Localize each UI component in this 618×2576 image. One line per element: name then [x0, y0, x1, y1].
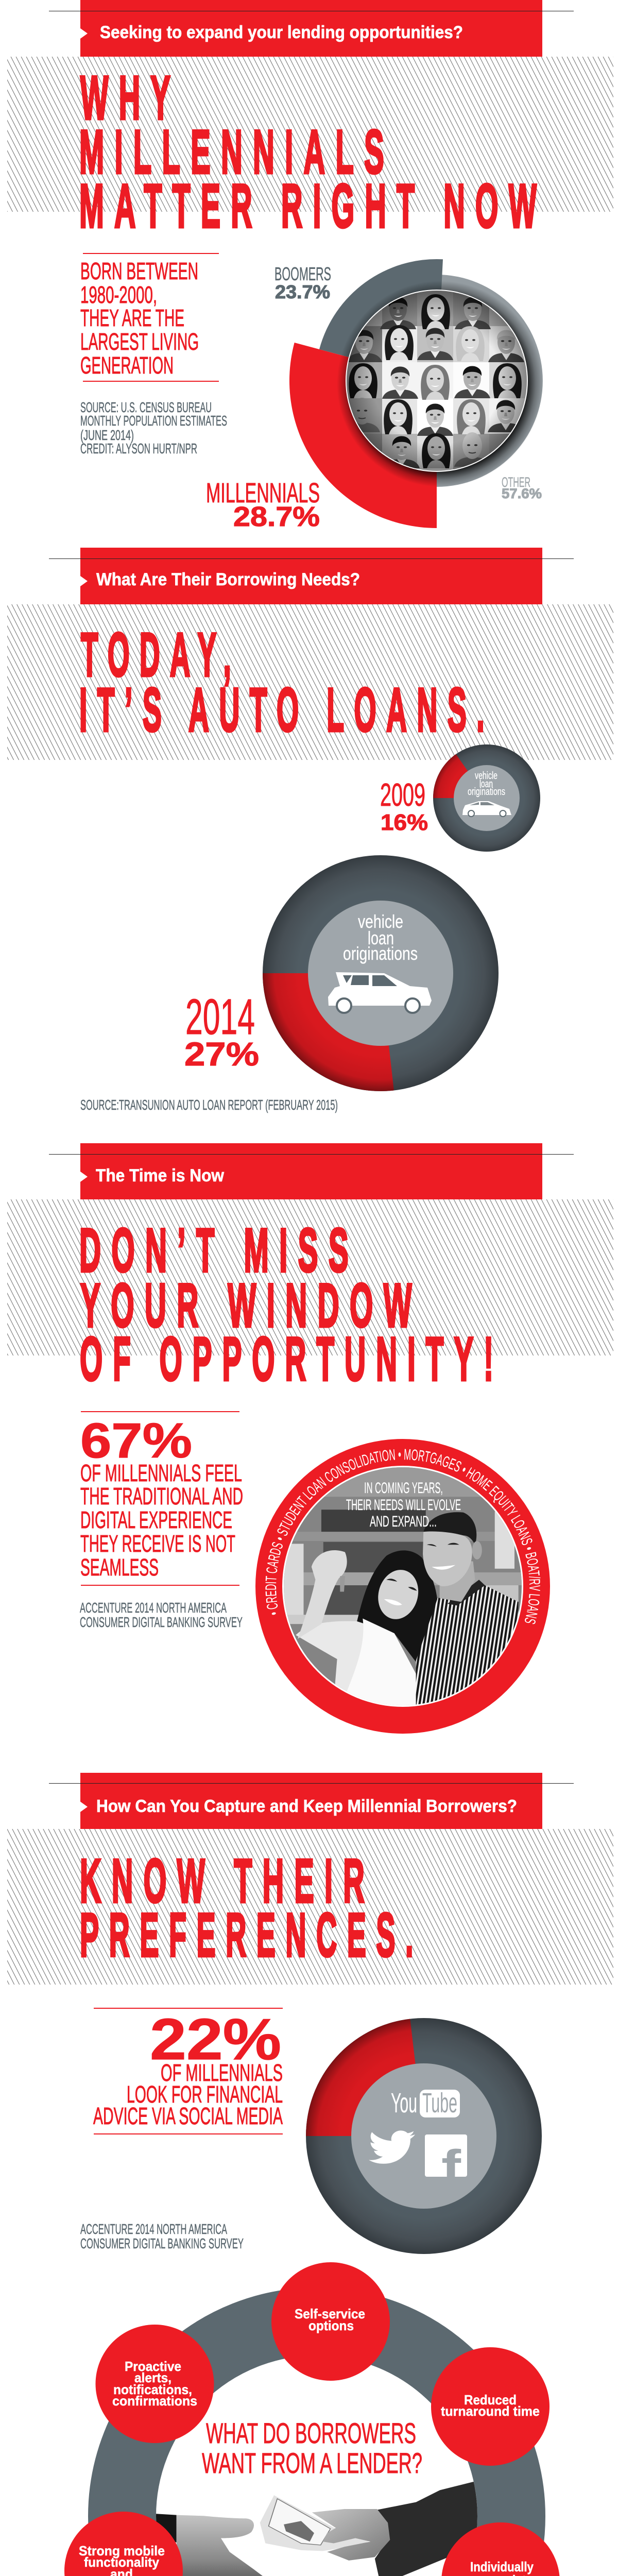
title: why millennials matter right now: WHY	[80, 63, 181, 132]
title: what do borrowers want from a lender: WHAT DO BORROWERS	[206, 2417, 416, 2449]
circle: self-service options: Self-service	[295, 2306, 365, 2321]
source note: accenture: ACCENTURE 2014 NORTH AMERICA	[80, 2221, 227, 2237]
callout: born between 1980-2000: GENERATION	[80, 352, 174, 379]
circle: individually appropriate offers	[441, 2522, 560, 2576]
source note: accenture	[80, 1600, 243, 1630]
callout: 67% of millennials: THE TRADITIONAL AND	[80, 1483, 243, 1510]
icon: youtube	[391, 2088, 460, 2119]
label: other: 57.6%	[502, 486, 542, 501]
icon: facebook	[425, 2134, 467, 2177]
donut chart: 2014 vehicle loan originations 27%: vehicle	[358, 911, 403, 932]
source note: accenture: CONSUMER DIGITAL BANKING SURVEY	[80, 2235, 244, 2251]
donut chart: 2014 vehicle loan originations 27%	[263, 855, 499, 1091]
icon: small car	[462, 801, 511, 817]
header bar: seeking to expand: Seeking to expand your lending opportunities?	[100, 23, 463, 42]
diagram: ring of what borrowers want	[64, 2262, 560, 2576]
donut chart: 2009 vehicle loan originations 16%: originations	[468, 786, 505, 798]
header bar: the time is now: The Time is Now	[96, 1166, 225, 1185]
donut chart: social media 22%	[306, 2018, 542, 2254]
header bar: the time is now	[49, 1143, 574, 1199]
header bar: borrowing needs	[49, 548, 574, 604]
label: boomers: 23.7%	[275, 281, 330, 302]
donut chart: 2009 vehicle loan originations 16%: loan	[479, 778, 493, 790]
source note: accenture	[80, 2221, 244, 2251]
callout: born between 1980-2000: 1980-2000,	[80, 281, 157, 308]
title: today, it's auto loans: TODAY,	[81, 620, 241, 689]
source note: accenture: CONSUMER DIGITAL BANKING SURVEY	[80, 1614, 243, 1630]
hatched band 1	[7, 57, 613, 212]
donut chart: 2014 vehicle loan originations 27%: loan	[368, 927, 394, 948]
circle: reduced turnaround time	[431, 2347, 550, 2466]
text: in coming years: IN COMING YEARS,	[364, 1480, 443, 1497]
label: other: OTHER	[502, 474, 530, 490]
callout: born between 1980-2000: BORN BETWEEN	[80, 258, 198, 284]
source note: census: (JUNE 2014)	[80, 427, 134, 443]
header bar: capture and keep: How Can You Capture and Keep Millennial Borrowers?	[96, 1797, 517, 1816]
hatched band 2	[7, 604, 613, 760]
callout: born between 1980-2000: LARGEST LIVING	[80, 328, 199, 355]
label: other	[502, 474, 542, 501]
hatched band 3	[7, 1199, 613, 1355]
label: boomers	[274, 263, 331, 302]
circle: proactive alerts	[96, 2325, 214, 2443]
callout: 67% of millennials: SEAMLESS	[80, 1554, 159, 1581]
callout: 67% of millennials: THEY RECEIVE IS NOT	[80, 1530, 235, 1557]
circle: proactive alerts: Proactive	[125, 2359, 181, 2374]
circle: proactive alerts: notifications,	[113, 2382, 192, 2397]
title: today, it's auto loans	[79, 620, 494, 744]
label: millennials: MILLENNIALS	[206, 478, 320, 509]
circle: proactive alerts: confirmations	[112, 2393, 197, 2409]
source note: census: MONTHLY POPULATION ESTIMATES	[80, 413, 227, 429]
title: know their preferences	[80, 1846, 423, 1970]
callout: born between 1980-2000: THEY ARE THE	[80, 304, 184, 331]
source note: accenture: ACCENTURE 2014 NORTH AMERICA	[80, 1600, 227, 1616]
source note: census: SOURCE: U.S. CENSUS BUREAU	[80, 399, 212, 415]
circle: self-service options: options	[308, 2318, 354, 2333]
callout: 67% of millennials: DIGITAL EXPERIENCE	[80, 1506, 232, 1533]
icon: twitter	[369, 2130, 415, 2164]
photo grid of millennial faces	[344, 290, 528, 471]
donut chart: 2009 vehicle loan originations 16%: vehicle	[475, 770, 497, 782]
header bar: borrowing needs: What Are Their Borrowing Needs?	[96, 570, 360, 589]
label: 2009 16%	[380, 777, 428, 835]
hatched band 4	[7, 1829, 613, 1985]
title: what do borrowers want from a lender	[202, 2417, 422, 2479]
circle: strong mobile functionality: Strong mobile	[79, 2543, 165, 2558]
circle: strong mobile functionality: functionality	[84, 2554, 160, 2570]
chart: generation share ring	[289, 259, 543, 528]
label: millennials: 28.7%	[233, 501, 320, 532]
circle: proactive alerts: alerts,	[134, 2370, 171, 2385]
callout: 22% of millennials: OF MILLENNIALS	[161, 2059, 283, 2086]
circle: strong mobile functionality	[64, 2512, 183, 2576]
donut chart: 2014 vehicle loan originations 27%: originations	[343, 943, 418, 964]
source note: census	[80, 399, 227, 456]
source note: transunion: SOURCE:TRANSUNION AUTO LOAN REPORT (FEBRUARY 2015)	[80, 1097, 338, 1113]
circular text: loan types: • CREDIT CARDS • STUDENT LOAN CONSOLIDATION • MORTGAGES • HOME EQUITY LOANS • BOAT/RV LOANS	[265, 1449, 541, 1624]
header bar: capture and keep	[49, 1773, 574, 1829]
title: what do borrowers want from a lender: WANT FROM A LENDER?	[202, 2447, 422, 2479]
label: 2009 16%: 2009	[380, 777, 425, 813]
label: 2014 27%	[184, 989, 259, 1073]
text: in coming years	[346, 1480, 461, 1530]
header bar: seeking to expand	[49, 0, 574, 57]
callout: 22% of millennials: 22%	[150, 2007, 281, 2072]
icon: large car	[328, 972, 432, 1013]
callout: 22% of millennials	[93, 2007, 283, 2134]
label: millennials	[206, 478, 320, 532]
circle: reduced turnaround time: Reduced	[464, 2392, 517, 2408]
source note: census: CREDIT: ALYSON HURT/NPR	[80, 440, 197, 456]
callout: born between 1980-2000	[80, 253, 219, 382]
circle: reduced turnaround time: turnaround time	[441, 2403, 540, 2419]
icon: youtube: You	[391, 2088, 417, 2119]
label: boomers: BOOMERS	[274, 263, 331, 284]
icon: youtube: Tube	[422, 2088, 457, 2119]
text: in coming years: THEIR NEEDS WILL EVOLVE	[346, 1497, 461, 1514]
title: don't miss your window of opportunity	[79, 1216, 504, 1394]
title: why millennials matter right now	[79, 63, 547, 241]
photo: hands exchanging money	[147, 2480, 481, 2576]
label: 2009 16%: 16%	[381, 810, 428, 835]
callout: 67% of millennials	[80, 1411, 243, 1586]
circular badge: loan types around couple photo	[255, 1439, 550, 1734]
label: 2014 27%: 27%	[184, 1036, 259, 1073]
callout: 22% of millennials: LOOK FOR FINANCIAL	[127, 2081, 283, 2108]
callout: 67% of millennials: OF MILLENNIALS FEEL	[80, 1460, 242, 1486]
text: in coming years: AND EXPAND...	[370, 1513, 437, 1530]
donut chart: 2009 vehicle loan originations 16%	[433, 744, 540, 852]
photo: couple holding keys	[284, 1467, 522, 1705]
callout: 67% of millennials: 67%	[80, 1413, 192, 1468]
circle: individually appropriate offers: Individually	[470, 2559, 534, 2574]
label: 2014 27%: 2014	[185, 989, 255, 1045]
circle: self-service options	[271, 2262, 390, 2381]
icon: facebook: f	[441, 2140, 461, 2195]
callout: 22% of millennials: ADVICE VIA SOCIAL MEDIA	[93, 2103, 283, 2129]
